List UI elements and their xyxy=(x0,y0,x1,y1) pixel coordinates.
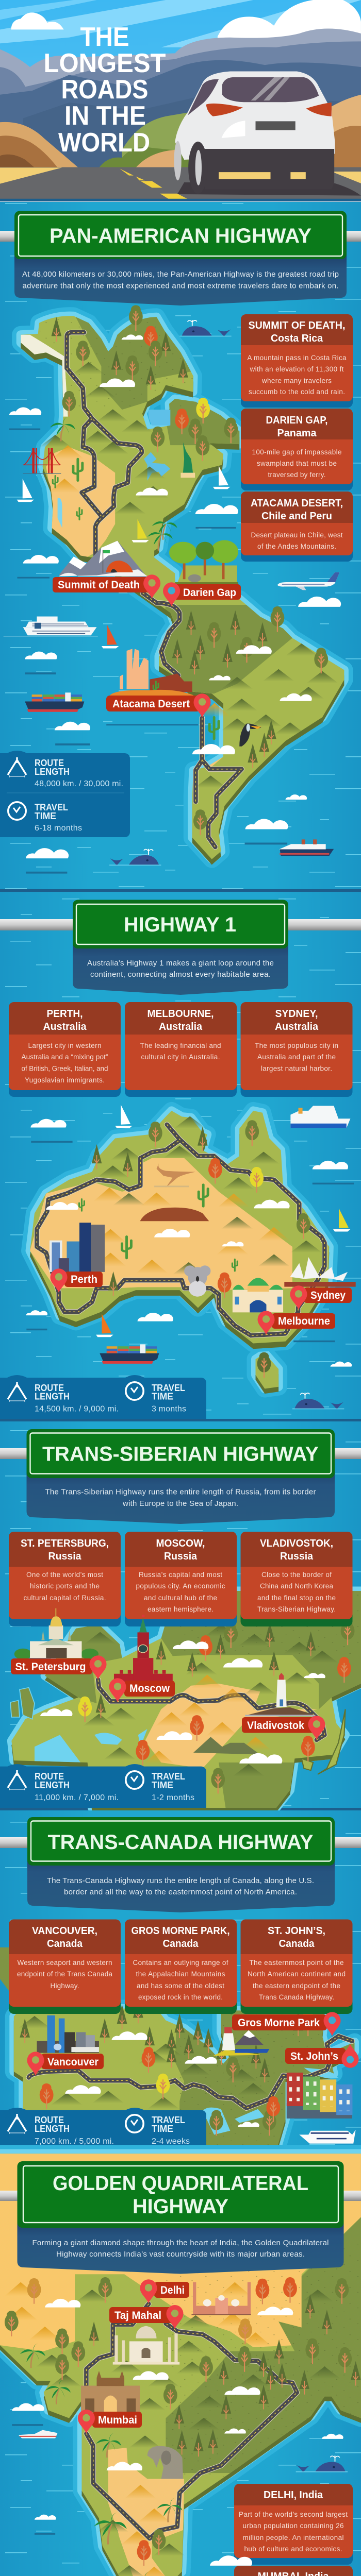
info card: Vladivostok: Close to the border of xyxy=(261,1571,332,1579)
map decoration: Eurasia trees, hills and clouds xyxy=(40,1620,354,1793)
info card: St. Petersburg: Russia xyxy=(48,1551,81,1562)
title: THE xyxy=(80,22,129,52)
stats panel: Highway 1: TRAVEL xyxy=(152,1383,185,1393)
landmark: mountain summit with tent xyxy=(59,541,147,577)
label: Taj Mahal: Taj Mahal xyxy=(114,2310,161,2321)
info card: Darien Gap: DARIEN GAP, xyxy=(266,415,328,426)
info card: Vladivostok: Trans-Siberian Highway. xyxy=(257,1605,336,1613)
info card: Moscow: MOSCOW, xyxy=(156,1538,205,1549)
highway sign: Trans-Siberian: The Trans-Siberian Highway runs the entire length of Russia, from its border xyxy=(45,1488,316,1496)
info card: Summit of Death: A mountain pass in Costa Rica xyxy=(248,354,347,362)
label: Summit of Death: Summit of Death xyxy=(58,579,140,591)
info card: Sydney: largest natural harbor. xyxy=(261,1064,332,1073)
info card: St. John's: ST. JOHN’S, xyxy=(268,1925,325,1937)
title: LONGEST xyxy=(43,48,166,78)
info card: Delhi: hub of culture and economics. xyxy=(244,2545,342,2553)
info card: Summit of Death: where many travelers xyxy=(261,377,332,384)
label: Atacama Desert: Atacama Desert xyxy=(112,698,190,710)
highway sign: Highway 1: HIGHWAY 1 xyxy=(124,913,236,936)
info card: Darien Gap: traversed by ferry. xyxy=(268,471,326,479)
label: Mumbai: Mumbai xyxy=(98,2414,137,2426)
label: Darien Gap xyxy=(163,582,241,606)
label: Sydney xyxy=(290,1285,352,1310)
stats panel: Trans-Canada: TRAVEL xyxy=(152,2115,185,2125)
title: ROADS xyxy=(61,75,149,105)
info card: Gros Morne Park: the Appalachian Mountains xyxy=(136,1970,225,1978)
map decoration: South America trees, hills, clouds and ships xyxy=(4,606,338,874)
stats panel: Trans-Siberian: 11,000 km. / 7,000 mi. xyxy=(35,1793,119,1802)
landmark: Jama Masjid xyxy=(191,2282,251,2315)
stats panel: Trans-Siberian: ROUTE xyxy=(35,1771,64,1782)
info card: St. Petersburg: ST. PETERSBURG, xyxy=(21,1538,109,1549)
info card: Vancouver: endpoint of the Trans Canada xyxy=(17,1970,112,1978)
road: Trans-Siberian route xyxy=(98,1680,324,1740)
highway sign: Highway 1 xyxy=(0,900,361,995)
info card: Sydney: Australia xyxy=(275,1021,319,1032)
info card: Moscow: populous city. An economic xyxy=(136,1582,225,1590)
info card: Melbourne: Australia xyxy=(159,1021,203,1032)
info card: Delhi xyxy=(234,2484,353,2565)
section background: Trans-Canada water xyxy=(0,1810,361,2154)
title: WORLD xyxy=(58,128,150,158)
info card: Darien Gap: Panama xyxy=(277,428,317,439)
stats panel: Pan-American: LENGTH xyxy=(35,767,70,777)
highway sign: Trans-Siberian: with Europe to the Sea of Japan. xyxy=(122,1499,238,1508)
info card: Moscow: Russia’s capital and most xyxy=(139,1571,222,1579)
info card: Summit of Death: SUMMIT OF DEATH, xyxy=(249,320,346,331)
stats panel: Trans-Canada xyxy=(0,2108,206,2151)
map: the Americas land xyxy=(21,313,344,865)
stats panel: Pan-American: TIME xyxy=(35,811,56,821)
landmark: koala xyxy=(184,1265,210,1297)
stats panel: Pan-American xyxy=(0,751,130,837)
stats panel: Pan-American: ROUTE xyxy=(35,758,64,768)
highway sign: Pan-American: PAN-AMERICAN HIGHWAY xyxy=(50,225,311,247)
info card: Perth: Largest city in western xyxy=(28,1042,101,1049)
info card: Atacama Desert: Desert plateau in Chile, west xyxy=(251,531,343,539)
info card: Gros Morne Park: Contains an outlying range of xyxy=(133,1959,228,1967)
landmark: Vladivostok lighthouse and hill xyxy=(245,1673,316,1716)
info card: Perth: PERTH, xyxy=(46,1008,83,1020)
stats panel: Pan-American: 6-18 months xyxy=(35,824,82,833)
info card: St. John's: the eastern endpoint of the xyxy=(253,1982,340,1990)
info card: Summit of Death: Costa Rica xyxy=(271,333,323,344)
stats panel: Trans-Siberian xyxy=(0,1764,206,1808)
landmark: St. Isaac's Cathedral xyxy=(14,1608,99,1659)
highway sign: Golden Quadrilateral: Forming a giant diamond shape through the heart of India, the Golden Quadrilateral xyxy=(32,2239,329,2247)
label: St. John's xyxy=(285,2044,359,2068)
highway sign: Golden Quadrilateral: Highway connects India’s vast countryside with its major urban areas. xyxy=(56,2250,305,2259)
info card: Vladivostok: and the final stop on the xyxy=(257,1594,336,1602)
info card: Vladivostok: Russia xyxy=(280,1551,314,1562)
highway sign: Trans-Canada: The Trans-Canada Highway runs the entire length of Canada, along the U.S. xyxy=(47,1876,314,1885)
info card: Atacama Desert: of the Andes Mountains. xyxy=(257,543,336,550)
stats panel: Trans-Canada: 7,000 km. / 5,000 mi. xyxy=(35,2137,114,2146)
label: Moscow xyxy=(109,1678,175,1702)
info card: Atacama Desert: Chile and Peru xyxy=(261,511,332,522)
stats panel: Trans-Canada: TIME xyxy=(152,2124,173,2134)
car xyxy=(174,72,361,196)
info card: Moscow: Russia xyxy=(164,1551,198,1562)
map decoration: Australia trees, hills, clouds and boats xyxy=(26,1105,354,1410)
info card: Gros Morne Park: GROS MORNE PARK, xyxy=(131,1925,230,1937)
info card: St. John's: Trans Canada Highway. xyxy=(259,1993,334,2001)
label: St. John's: St. John’s xyxy=(290,2050,338,2062)
label: Perth xyxy=(50,1268,103,1293)
icon: elephant xyxy=(147,2446,183,2479)
landmark: Vancouver skyline xyxy=(37,2015,99,2053)
info card: Darien Gap xyxy=(241,409,353,490)
stats panel: Trans-Canada: LENGTH xyxy=(35,2124,70,2134)
info card: Vancouver: Western seaport and western xyxy=(18,1959,112,1967)
landmark: Perth skyline xyxy=(50,1223,105,1272)
label: Atacama Desert xyxy=(106,693,211,718)
info card: Sydney: Australia and part of the xyxy=(257,1053,336,1061)
landmark: Flinders Street Station xyxy=(233,1278,283,1312)
info card: Moscow: and cultural hub of the xyxy=(144,1594,217,1602)
label: Vladivostok xyxy=(242,1716,325,1740)
info card: Vancouver: Highway. xyxy=(51,1982,79,1990)
road: Highway 1 loop xyxy=(37,1125,324,1335)
info card: Darien Gap: swampland that must be xyxy=(257,460,337,467)
stats panel: Trans-Siberian: TRAVEL xyxy=(152,1771,185,1782)
label: Gros Morne Park: Gros Morne Park xyxy=(238,2017,320,2029)
info card: Sydney xyxy=(240,1002,353,1097)
info card: Perth: Yugoslavian immigrants. xyxy=(25,1076,105,1084)
map: Australia land xyxy=(30,1111,329,1394)
info card: Vladivostok: China and North Korea xyxy=(260,1582,333,1590)
cloud overlapping cards xyxy=(210,2555,252,2576)
highway sign: Trans-Canada xyxy=(0,1817,361,1912)
title xyxy=(43,22,166,158)
info card: Summit of Death: succumb to the cold and rain. xyxy=(249,388,345,396)
highway sign: Pan-American: adventure that only the most experienced and most extreme travelers dare to embark on. xyxy=(23,281,338,291)
info card: Perth: Australia and a “mixing pot” xyxy=(22,1053,108,1061)
highway sign: Pan-American: At 48,000 kilometers or 30,000 miles, the Pan-American Highway is the greatest road trip xyxy=(22,270,339,279)
landmark: Gros Morne lighthouse and mountain xyxy=(213,2027,269,2056)
info card: Gros Morne Park xyxy=(125,1920,237,2014)
info card: Vancouver: VANCOUVER, xyxy=(32,1925,97,1937)
stats panel: Pan-American: 48,000 km. / 30,000 mi. xyxy=(35,779,123,788)
road: Pan-American route xyxy=(67,332,242,847)
stats panel: Highway 1: 14,500 km. / 9,000 mi. xyxy=(35,1404,119,1414)
label: Melbourne xyxy=(257,1311,335,1335)
info card: Moscow xyxy=(125,1532,237,1626)
info card: Delhi: DELHI, India xyxy=(264,2489,323,2501)
section background: Pan-American water xyxy=(0,202,361,892)
stats panel: Highway 1 xyxy=(0,1375,206,1419)
landmark: St. John's row houses xyxy=(287,2073,352,2119)
info card: Summit of Death: with an elevation of 11,300 ft xyxy=(250,365,344,373)
stats panel: Trans-Canada: 2-4 weeks xyxy=(152,2137,190,2146)
highway sign: Golden Quadrilateral: HIGHWAY xyxy=(133,2195,228,2218)
info card: Melbourne: The leading financial and xyxy=(140,1042,221,1049)
info card: Vladivostok: VLADIVOSTOK, xyxy=(260,1538,333,1549)
icon: cruise ship xyxy=(299,2130,356,2144)
info card: Sydney: SYDNEY, xyxy=(275,1008,318,1020)
landmark: Kremlin tower xyxy=(114,1615,173,1682)
highway sign: Trans-Canada: TRANS-CANADA HIGHWAY xyxy=(47,1831,314,1854)
info card: Perth: of British, Greek, Italian, and xyxy=(22,1064,108,1073)
map decoration: North America trees, hills, clouds, boats xyxy=(9,305,341,607)
highway sign: Golden Quadrilateral xyxy=(0,2161,361,2274)
map decoration: Canada trees, hills and clouds xyxy=(19,1998,315,2136)
landmark: Darien Gap jungle xyxy=(169,540,238,584)
info card: Melbourne xyxy=(125,1002,237,1097)
landmark: Gateway of India xyxy=(81,2371,140,2412)
info card: St. John's xyxy=(240,1920,353,2014)
landmark: Statue of Liberty xyxy=(180,442,195,478)
label: Vladivostok: Vladivostok xyxy=(247,1720,304,1732)
info card: Atacama Desert: ATACAMA DESERT, xyxy=(251,498,343,509)
section background: Trans-Siberian water xyxy=(0,1421,361,1810)
info card: Gros Morne Park: Canada xyxy=(163,1938,199,1950)
stats panel: Highway 1: TIME xyxy=(152,1391,173,1401)
highway sign: Trans-Canada: border and all the way to the easternmost point of North America. xyxy=(64,1888,297,1896)
label: Moscow: Moscow xyxy=(129,1683,170,1694)
info card: St. Petersburg xyxy=(9,1532,121,1626)
label: Vancouver: Vancouver xyxy=(47,2056,99,2068)
map: Eurasia land xyxy=(10,1591,361,1812)
info card: Darien Gap: 100-mile gap of impassable xyxy=(252,448,341,456)
info card: Delhi: million people. An international xyxy=(242,2534,343,2541)
stats panel: Highway 1: 3 months xyxy=(152,1404,186,1414)
info card: St. John's: Canada xyxy=(278,1938,315,1950)
label: Delhi: Delhi xyxy=(160,2284,185,2296)
info card: Summit of Death xyxy=(241,314,353,408)
label: Taj Mahal xyxy=(109,2305,184,2329)
stats panel: Trans-Siberian: TIME xyxy=(152,1780,173,1790)
info card: Atacama Desert xyxy=(241,492,353,562)
section background: Golden Quadrilateral water xyxy=(0,2154,361,2576)
label: Perth: Perth xyxy=(71,1274,97,1285)
label: Darien Gap: Darien Gap xyxy=(183,587,236,599)
highway sign: Highway 1: Australia’s Highway 1 makes a giant loop around the xyxy=(87,959,274,968)
info card: St. Petersburg: One of the world’s most xyxy=(26,1571,103,1579)
info card: Melbourne: cultural city in Australia. xyxy=(141,1053,220,1061)
title: IN THE xyxy=(64,101,146,131)
highway sign: Highway 1: continent, connecting almost every habitable area. xyxy=(90,970,271,979)
map decoration: India trees, hills, clouds and ships xyxy=(1,2277,361,2576)
hero illustration: sky, mountains and road xyxy=(0,0,361,201)
label: Sydney: Sydney xyxy=(310,1290,346,1301)
info card: Mumbai xyxy=(234,2566,353,2576)
label: St. Petersburg: St. Petersburg xyxy=(15,1661,86,1673)
info card: Sydney: The most populous city in xyxy=(255,1042,338,1049)
section background: Highway 1 water xyxy=(0,892,361,1421)
info card: St. John's: The easternmost point of the xyxy=(250,1959,343,1967)
label: St. Petersburg xyxy=(11,1655,107,1680)
info card: St. John's: North American continent and xyxy=(248,1970,346,1978)
stats panel: Trans-Canada: ROUTE xyxy=(35,2115,64,2125)
landmark: Taj Mahal xyxy=(113,2326,179,2365)
info card: St. Petersburg: historic ports and the xyxy=(30,1582,100,1590)
label: Mumbai xyxy=(78,2410,142,2434)
landmark: Golden Gate Bridge xyxy=(23,448,61,474)
info card: Perth xyxy=(9,1002,121,1097)
label: Delhi xyxy=(140,2279,189,2303)
stats panel: Trans-Siberian: LENGTH xyxy=(35,1780,70,1790)
info card: Delhi: Part of the world’s second largest xyxy=(239,2511,348,2518)
highway sign: Trans-Siberian: TRANS-SIBERIAN HIGHWAY xyxy=(42,1443,319,1465)
road: Golden Quadrilateral route xyxy=(86,2304,297,2538)
info card: Vancouver xyxy=(9,1920,121,2014)
info card: Perth: Australia xyxy=(43,1021,87,1032)
landmark: Sydney Opera House xyxy=(284,1257,356,1287)
info card: Vladivostok xyxy=(240,1532,353,1626)
highway sign: Golden Quadrilateral: GOLDEN QUADRILATERAL xyxy=(53,2172,308,2195)
stats panel: Highway 1: ROUTE xyxy=(35,1383,64,1393)
info card: Gros Morne Park: and has some of the oldest xyxy=(137,1982,224,1990)
stats panel: Trans-Siberian: 1-2 months xyxy=(152,1793,194,1802)
map: India land xyxy=(0,2154,361,2576)
road: Trans-Canada route xyxy=(29,2036,352,2108)
label: Summit of Death xyxy=(53,574,160,599)
info card: Delhi: urban population containing 26 xyxy=(242,2522,343,2530)
label: Gros Morne Park xyxy=(232,2012,341,2036)
highway sign: Pan-American xyxy=(0,211,361,306)
info card: Vancouver: Canada xyxy=(47,1938,83,1950)
highway sign: Trans-Siberian xyxy=(0,1429,361,1524)
info card: Melbourne: MELBOURNE, xyxy=(147,1008,214,1020)
label: Vancouver xyxy=(27,2052,104,2076)
info card: Gros Morne Park: exposed rock in the world. xyxy=(138,1993,223,2001)
stats panel: Pan-American: TRAVEL xyxy=(35,802,68,812)
label: Melbourne: Melbourne xyxy=(278,1315,330,1327)
landmark: Atacama Desert rocks xyxy=(109,649,193,697)
stats panel: Highway 1: LENGTH xyxy=(35,1391,70,1401)
map: Canada land xyxy=(0,1947,361,2155)
info card: Moscow: eastern hemisphere. xyxy=(147,1605,214,1613)
info card: St. Petersburg: cultural capital of Russia. xyxy=(24,1594,106,1602)
